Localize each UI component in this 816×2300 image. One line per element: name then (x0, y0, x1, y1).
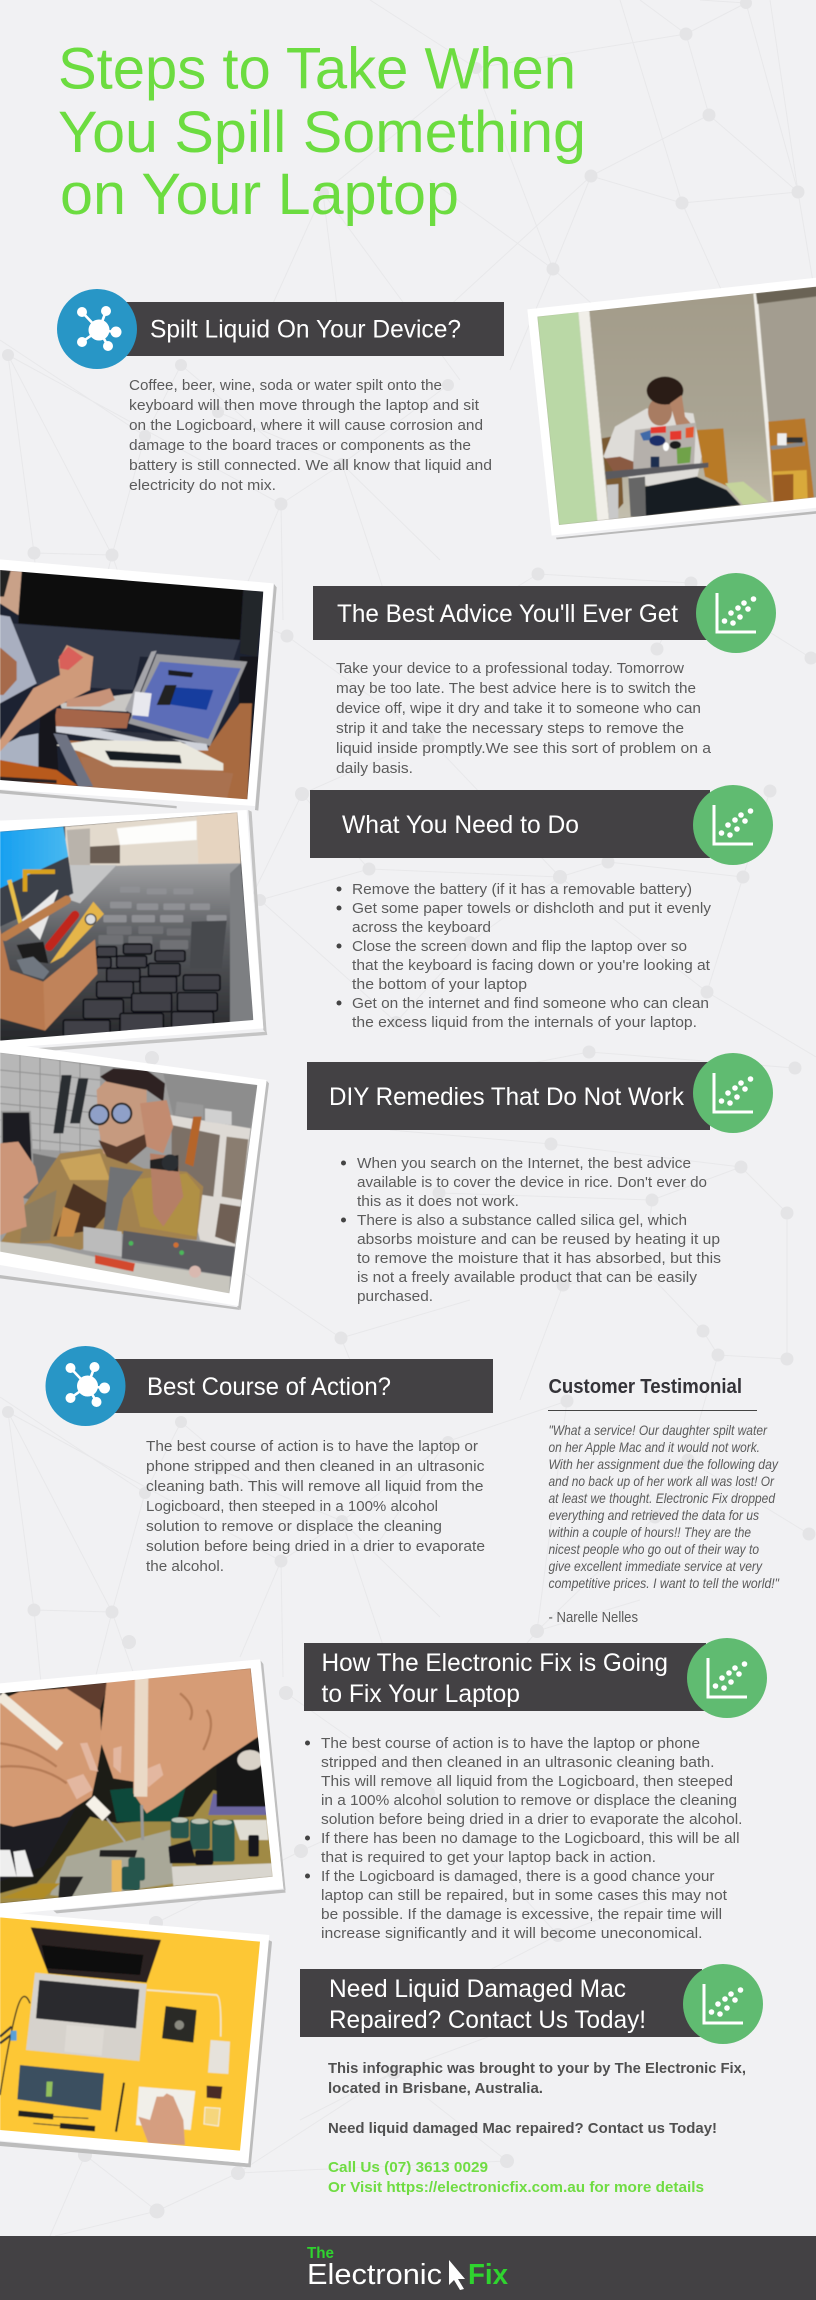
logo (307, 2245, 508, 2291)
bullet list: how the electronic fix helps: This will remove all liquid from the Logicboard, then steeped (321, 1773, 733, 1790)
heading bar: best advice: The Best Advice You'll Ever Get (337, 600, 678, 628)
text block: best course of action (146, 1438, 485, 1575)
bullet list: how the electronic fix helps: that is required to get your laptop back in action. (321, 1849, 656, 1866)
photo: meeting with laptop on wooden table (0, 559, 277, 811)
heading bar: best course of action: Best Course of Action? (147, 1373, 391, 1401)
logo: Electronic (307, 2259, 442, 2291)
heading bar: what you need to do: What You Need to Do (342, 811, 579, 839)
text block: best course of action: solution before being dried in a drier to evaporate (146, 1538, 485, 1555)
bullet list: how the electronic fix helps: increase significantly and it will become uneconomical. (321, 1925, 702, 1942)
heading bar: DIY remedies (307, 1053, 773, 1133)
heading bar: contact (300, 1964, 763, 2044)
bullet list: what you need to do: Close the screen down and flip the laptop over so (352, 938, 687, 955)
heading bar: how the electronic fix helps: to Fix Your Laptop (322, 1680, 520, 1708)
contact details: Call Us (07) 3613 0029 (328, 2159, 488, 2176)
footer (0, 2236, 816, 2300)
testimonial quote: at least we thought. Electronic Fix dropped (548, 1490, 776, 1506)
testimonial quote: competitive prices. I want to tell the world!" (548, 1575, 780, 1591)
contact details (328, 2159, 704, 2196)
heading bar: what you need to do (310, 785, 773, 865)
bullet list: how the electronic fix helps: stripped and then cleaned in an ultrasonic cleaning bath. (321, 1754, 714, 1771)
bullet list: DIY remedies: When you search on the Internet, the best advice (357, 1155, 691, 1172)
heading bar: how the electronic fix helps (304, 1638, 767, 1718)
icon: cursor arrow (449, 2260, 465, 2290)
section: what you need to do (310, 785, 773, 1031)
text block: spilt liquid: Coffee, beer, wine, soda or water spilt onto the (129, 377, 442, 394)
text block: best advice: strip it and take the necessary steps to remove the (336, 720, 684, 737)
testimonial heading: Customer Testimonial (548, 1376, 742, 1398)
bullet list: what you need to do: Get some paper towels or dishcloth and put it evenly (352, 900, 712, 917)
bullet list: how the electronic fix helps: laptop can still be repaired, but in some cases this may not (321, 1887, 728, 1904)
testimonial quote: within a couple of hours!! They are the (548, 1524, 751, 1540)
text block: best course of action: phone stripped and then cleaned in an ultrasonic (146, 1458, 485, 1475)
heading bar: best course of action (46, 1346, 493, 1426)
text block: contact: located in Brisbane, Australia. (328, 2080, 543, 2097)
text block: spilt liquid (129, 377, 492, 494)
bullet list: how the electronic fix helps: in a 100% alcohol solution to remove or displace the cleaning (321, 1792, 737, 1809)
heading bar: contact: Repaired? Contact Us Today! (329, 2006, 646, 2034)
text block: best advice: may be too late. The best advice here is to switch the (336, 680, 696, 697)
title (58, 36, 586, 227)
text block: spilt liquid: damage to the board traces or components as the (129, 437, 471, 454)
text block: spilt liquid: keyboard will then move through the laptop and sit (129, 397, 480, 414)
bullet list: how the electronic fix helps: be possible. If the damage is excessive, the repair time will (321, 1906, 722, 1923)
testimonial quote: With her assignment due the following day (548, 1456, 779, 1472)
testimonial quote (548, 1422, 780, 1591)
text block: contact (328, 2060, 746, 2137)
bullet list: what you need to do: Get on the internet and find someone who can clean (352, 995, 709, 1012)
bullet list: DIY remedies: available is to cover the device in rice. Don't ever do (357, 1174, 707, 1191)
bullet list: what you need to do (336, 881, 712, 1031)
bullet list: DIY remedies: absorbs moisture and can be reused by heating it up (357, 1231, 720, 1248)
bullet list: what you need to do: Remove the battery (if it has a removable battery) (352, 881, 692, 898)
testimonial quote: everything and retrieved the data for us (548, 1507, 759, 1523)
section: spilt liquid (57, 289, 504, 494)
bullet list: what you need to do: across the keyboard (352, 919, 491, 936)
photo: man frustrated at laptop (520, 270, 816, 539)
testimonial quote: and no back up of her work all was lost! Or (548, 1473, 775, 1489)
bullet list: how the electronic fix helps: The best course of action is to have the laptop or phone (321, 1735, 700, 1752)
panel: customer testimonial (548, 1376, 780, 1626)
bullet list: DIY remedies (341, 1155, 721, 1305)
heading bar: contact: Need Liquid Damaged Mac (329, 1975, 626, 2003)
photo: hands repairing circuit board (0, 1659, 286, 1915)
bullet list: DIY remedies: is not a freely available product that can be easily (357, 1269, 698, 1286)
bullet list: DIY remedies: to remove the moisture that it has absorbed, but this (357, 1250, 721, 1267)
logo: Fix (468, 2259, 508, 2291)
bullet list: how the electronic fix helps: If the Logicboard is damaged, there is a good chance your (321, 1868, 714, 1885)
text block: best advice: Take your device to a professional today. Tomorrow (336, 660, 684, 677)
heading bar: best advice (313, 573, 776, 653)
bullet list: how the electronic fix helps: If there has been no damage to the Logicboard, this will be all (321, 1830, 740, 1847)
text block: contact: This infographic was brought to your by The Electronic Fix, (328, 2060, 746, 2077)
testimonial author: - Narelle Nelles (548, 1609, 638, 1626)
heading bar: Spilt Liquid (57, 289, 504, 369)
bullet list: what you need to do: the bottom of your laptop (352, 976, 527, 993)
text block: best advice: device off, wipe it dry and take it to someone who can (336, 700, 701, 717)
bullet list: how the electronic fix helps: solution before being dried in a drier to evaporate the alcohol. (321, 1811, 742, 1828)
testimonial quote: give excellent immediate service at very (548, 1558, 763, 1574)
text block: best advice (336, 660, 712, 777)
title: Steps to Take When (58, 36, 576, 102)
section: DIY remedies (307, 1053, 773, 1305)
text block: spilt liquid: battery is still connected. We all know that liquid and (129, 457, 492, 474)
heading bar: DIY remedies: DIY Remedies That Do Not Work (329, 1083, 684, 1111)
bullet list: what you need to do: the excess liquid from the internals of your laptop. (352, 1014, 697, 1031)
text block: spilt liquid: electricity do not mix. (129, 477, 276, 494)
heading bar: Spilt Liquid: Spilt Liquid On Your Device? (150, 316, 461, 344)
photo: toolbox on keyboard (0, 800, 267, 1052)
text block: best course of action: the alcohol. (146, 1558, 224, 1575)
text block: best course of action: The best course of action is to have the laptop or (146, 1438, 478, 1455)
bullet list: what you need to do: that the keyboard is facing down or you're looking at (352, 957, 711, 974)
section: best course of action (46, 1346, 493, 1575)
bullet list: DIY remedies: this as it does not work. (357, 1193, 519, 1210)
title: on Your Laptop (60, 162, 459, 227)
heading bar: how the electronic fix helps: How The Electronic Fix is Going (322, 1649, 668, 1677)
text block: contact: Need liquid damaged Mac repaired? Contact us Today! (328, 2120, 717, 2137)
section: how the electronic fix helps (304, 1638, 767, 1942)
bullet list: DIY remedies: purchased. (357, 1288, 433, 1305)
text block: best advice: daily basis. (336, 760, 413, 777)
section: contact (300, 1964, 763, 2196)
photo: laptop and parts on yellow desk (0, 1900, 272, 2167)
title: You Spill Something (58, 100, 586, 165)
bullet list: how the electronic fix helps (305, 1735, 742, 1942)
text block: best course of action: solution to remove or displace the cleaning (146, 1518, 442, 1535)
testimonial quote: on her Apple Mac and it would not work. (548, 1439, 760, 1455)
logo: The (307, 2245, 334, 2262)
testimonial quote: "What a service! Our daughter spilt water (548, 1422, 768, 1438)
text block: spilt liquid: on the Logicboard, where it will cause corrosion and (129, 417, 483, 434)
photo: man with glasses and phone at workbench (0, 1040, 269, 1310)
text block: best advice: liquid inside promptly.We see this sort of problem on a (336, 740, 712, 757)
section: best advice (313, 573, 776, 777)
bullet list: DIY remedies: There is also a substance called silica gel, which (357, 1212, 687, 1229)
text block: best course of action: cleaning bath. This will remove all liquid from the (146, 1478, 484, 1495)
contact details: Or Visit https://electronicfix.com.au for more details (328, 2179, 704, 2196)
text block: best course of action: Logicboard, then steeped in a 100% alcohol (146, 1498, 438, 1515)
testimonial quote: nicest people who go out of their way to (548, 1541, 759, 1557)
